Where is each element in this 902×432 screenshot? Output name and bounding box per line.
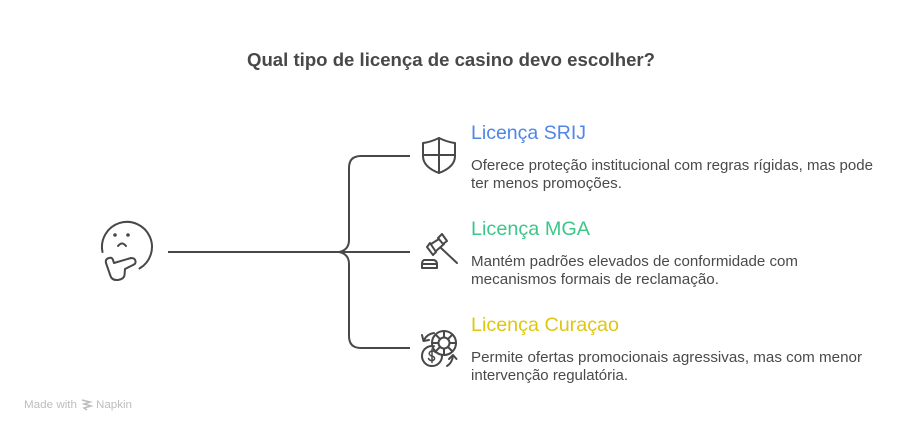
- text: MGA description: Mantém padrões elevados de conformidade com: [471, 254, 798, 270]
- text: Curaçao description: [471, 350, 862, 384]
- connector lines: [168, 156, 410, 348]
- heading: Licença MGA: Licença MGA: [471, 218, 590, 240]
- title: Qual tipo de licença de casino devo escolher?: [247, 49, 655, 70]
- watermark: Made with Napkin: Made with: [24, 399, 77, 411]
- heading: Licença SRIJ: Licença SRIJ: [471, 122, 586, 144]
- text: Curaçao description: intervenção regulatória.: [471, 368, 628, 384]
- text: SRIJ description: [471, 158, 873, 192]
- icon: shield: [423, 138, 455, 173]
- text: MGA description: [471, 254, 798, 288]
- icon: gavel: [422, 234, 457, 268]
- watermark: Made with Napkin: [24, 399, 132, 411]
- text: Curaçao description: Permite ofertas promocionais agressivas, mas com menor: [471, 350, 862, 366]
- text: MGA description: mecanismos formais de reclamação.: [471, 272, 719, 288]
- text: SRIJ description: Oferece proteção institucional com regras rígidas, mas pode: [471, 158, 873, 174]
- watermark: Made with Napkin: Napkin: [96, 399, 132, 411]
- text: SRIJ description: ter menos promoções.: [471, 176, 622, 192]
- heading: Licença Curaçao: Licença Curaçao: [471, 314, 619, 336]
- icon: casino chip and coin: [422, 331, 456, 366]
- icon: thinking face: [102, 222, 152, 280]
